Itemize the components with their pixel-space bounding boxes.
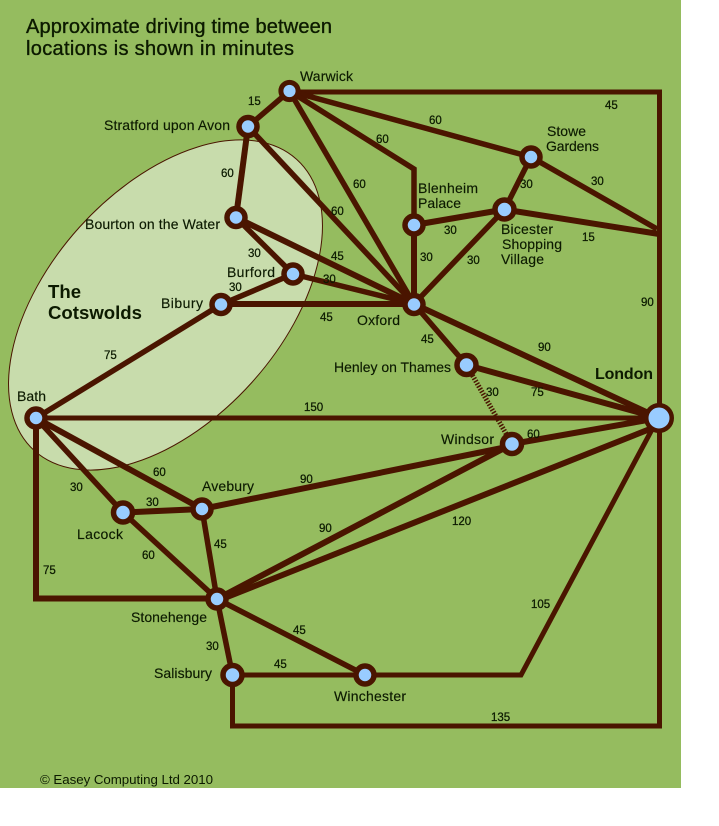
driving time labels: 60 [376,134,389,146]
node: Henley on Thames [457,356,476,374]
node: London [646,405,672,431]
place labels [17,68,653,704]
driving time labels [43,96,654,724]
place labels: Lacock [77,526,124,542]
place labels: Bibury [161,295,203,311]
node: Salisbury [223,666,242,684]
place labels: Bourton on the Water [85,216,220,232]
place labels: London [595,366,653,383]
driving time labels: 30 [70,482,83,494]
node: Stratford upon Avon [239,118,257,136]
driving time labels: 45 [214,539,227,551]
node: Windsor [502,434,522,454]
place labels: Warwick [300,68,354,84]
driving time labels: 30 [486,387,499,399]
place labels: Winchester [334,688,406,704]
driving time labels: 75 [531,387,544,399]
region label: The Cotswolds [48,281,142,323]
title: locations is shown in minutes [26,38,294,60]
driving time labels: 90 [538,342,551,354]
driving time labels: 30 [146,497,159,509]
driving time labels: 15 [248,96,261,108]
node: Blenheim Palace [405,216,423,234]
driving time labels: 60 [429,115,442,127]
node: Bicester Shopping Village [495,200,514,219]
node: Bourton on the Water [227,208,245,226]
driving time labels: 30 [323,274,336,286]
node: Bath [27,409,45,427]
driving time labels: 75 [104,350,117,362]
driving time labels: 60 [331,206,344,218]
place labels: Shopping [502,236,562,252]
driving time labels: 90 [300,474,313,486]
place labels: Bicester [501,221,553,237]
driving time labels: 30 [444,225,457,237]
driving time labels: 30 [420,252,433,264]
driving time labels: 60 [221,168,234,180]
node: Bibury [212,296,230,314]
copyright: © Easey Computing Ltd 2010 [40,772,213,787]
driving time labels: 30 [467,255,480,267]
driving time labels: 150 [304,402,323,414]
driving time labels: 30 [206,641,219,653]
place labels: Stonehenge [131,609,207,625]
driving time labels: 90 [319,523,332,535]
driving time labels: 45 [331,251,344,263]
node: Lacock [114,503,132,522]
driving time labels: 45 [421,334,434,346]
driving time labels: 60 [142,550,155,562]
driving time labels: 30 [520,179,533,191]
place labels: Burford [227,264,275,280]
title [26,16,332,60]
node: Oxford [405,296,423,314]
driving time labels: 45 [320,312,333,324]
nodes [27,82,672,684]
region: The Cotswolds ellipse [0,82,383,528]
driving time labels: 60 [527,429,540,441]
place labels: Village [501,251,544,267]
driving time labels: 60 [353,179,366,191]
driving time labels: 60 [153,467,166,479]
node: Warwick [281,82,298,100]
node: Stowe Gardens [522,148,540,166]
driving time labels: 30 [591,176,604,188]
place labels: Blenheim [418,180,478,196]
driving time labels: 45 [293,625,306,637]
title: Approximate driving time between [26,16,332,38]
driving time labels: 45 [274,659,287,671]
driving time labels: 45 [605,100,618,112]
driving time labels: 135 [491,712,510,724]
place labels: Stowe [547,123,586,139]
driving time labels: 30 [248,248,261,260]
region label: The Cotswolds: Cotswolds [48,302,142,323]
place labels: Palace [418,195,461,211]
driving time labels: 75 [43,565,56,577]
place labels: Gardens [546,138,599,154]
place labels: Avebury [202,478,254,494]
node: Winchester [356,666,374,684]
place labels: Oxford [357,312,400,328]
driving time labels: 15 [582,232,595,244]
node: Avebury [193,500,211,518]
place labels: Salisbury [154,665,212,681]
place labels: Stratford upon Avon [104,117,230,133]
region label: The Cotswolds: The [48,281,81,302]
place labels: Henley on Thames [334,359,451,375]
driving time labels: 90 [641,297,654,309]
driving time labels: 30 [229,282,242,294]
driving time labels: 105 [531,599,550,611]
place labels: Windsor [441,431,494,447]
place labels: Bath [17,388,46,404]
route lines [36,91,660,726]
driving time labels: 120 [452,516,471,528]
node: Stonehenge [208,590,226,608]
node: Burford [284,265,302,283]
